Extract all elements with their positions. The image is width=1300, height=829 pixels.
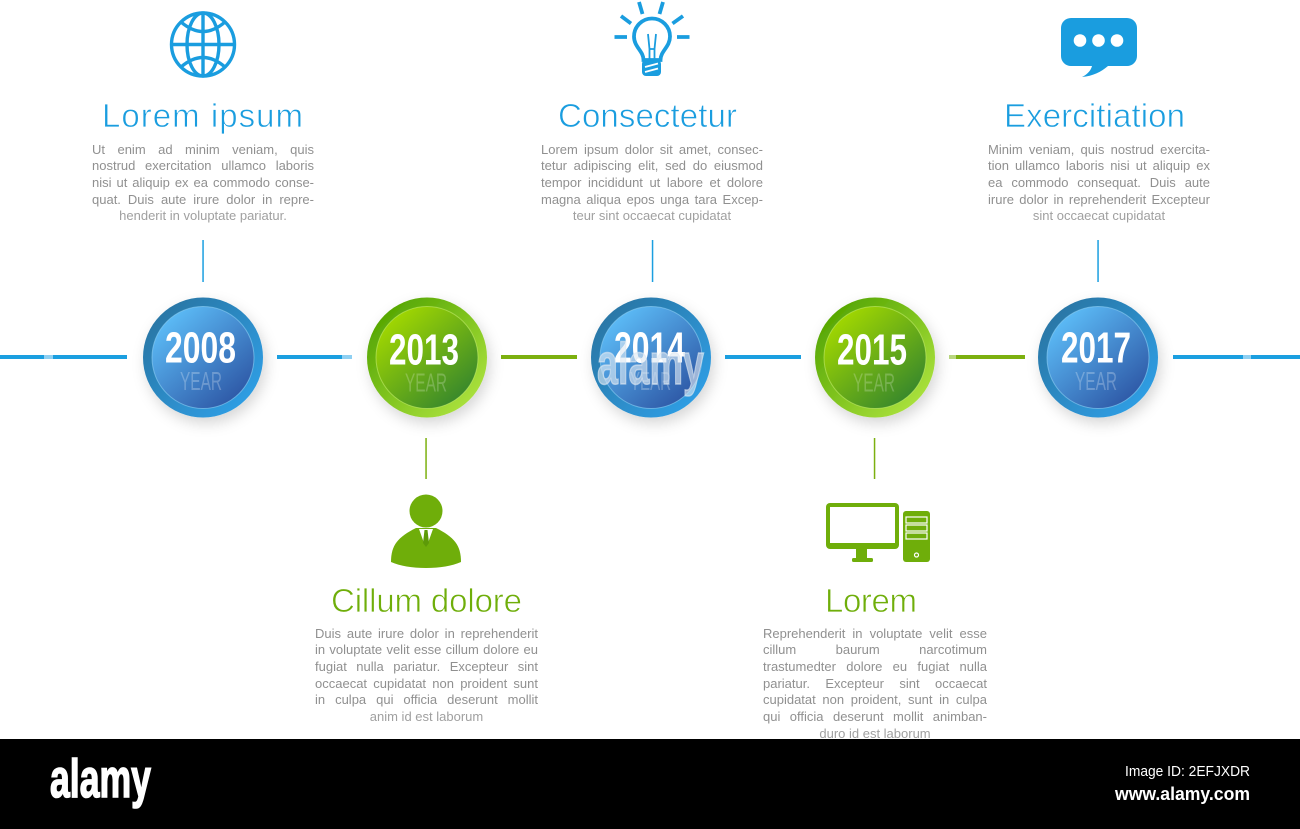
icon: businessman xyxy=(391,494,461,568)
badge: 2015: YEAR xyxy=(853,368,895,398)
badge: 2008 xyxy=(143,298,263,418)
text block xyxy=(763,626,987,739)
panel: Lorem 2015 xyxy=(763,503,987,739)
panel: Lorem ipsum 2008 xyxy=(92,11,314,223)
text block xyxy=(92,142,314,223)
text block: tempor incididunt ut labore et dolore xyxy=(541,175,763,190)
heading: Lorem xyxy=(825,582,917,619)
badge: 2017 xyxy=(1038,298,1158,418)
text block: qui officia deserunt mollit animban- xyxy=(763,709,987,724)
badge: 2017: YEAR xyxy=(1075,366,1117,396)
heading: Lorem ipsum xyxy=(102,97,303,134)
heading: Consectetur xyxy=(558,97,737,134)
badge: 2015 xyxy=(815,298,935,418)
text block: nostrud exercitation ullamco laboris xyxy=(92,158,314,173)
text block: occaecat cupidatat non proident sunt xyxy=(315,676,538,691)
icon: light bulb xyxy=(614,2,690,76)
heading: Cillum dolore xyxy=(331,582,522,619)
text block: cillum baurum narcotimum xyxy=(763,642,987,657)
image id text xyxy=(1114,763,1250,804)
icon: globe xyxy=(170,11,236,78)
text block: trastumedter dolore eu fugiat nulla xyxy=(763,659,987,674)
text block: cupidatat non proident, sunt in culpa xyxy=(763,692,987,707)
text block: Ut enim ad minim veniam, quis xyxy=(92,142,314,156)
text block: Minim veniam, quis nostrud exercita- xyxy=(988,142,1210,156)
badge: 2014: YEAR xyxy=(630,366,671,396)
badge: 2013: 2013 xyxy=(389,326,459,374)
badge: 2013: YEAR xyxy=(405,368,447,398)
text block: anim id est laborum xyxy=(370,709,483,724)
badge: 2014: 2014 xyxy=(614,324,685,372)
text block: magna aliqua epos unga tara Excep- xyxy=(541,192,763,207)
text block: fugiat nulla pariatur. Excepteur sint xyxy=(315,659,538,674)
stems xyxy=(202,240,1099,479)
image id text: www.alamy.com xyxy=(1114,784,1250,804)
panel: Exercitiation 2017 xyxy=(988,18,1210,223)
text block: irure dolor in reprehenderit Excepteur xyxy=(988,192,1210,207)
text block: Reprehenderit in voluptate velit esse xyxy=(763,626,987,640)
badge: 2008: 2008 xyxy=(165,324,236,372)
text block: Duis aute irure dolor in reprehenderit xyxy=(315,626,538,640)
text block: in voluptate velit esse cillum dolore eu xyxy=(315,642,538,657)
timeline xyxy=(0,240,1300,479)
text block: ea commodo consequat. Duis aute xyxy=(988,175,1210,190)
watermark on 2014 badge: alamy xyxy=(597,332,704,397)
text block: tion ullamco laboris nisi ut aliquip ex xyxy=(988,158,1210,173)
text block: sint occaecat cupidatat xyxy=(1033,208,1165,223)
footer: alamy bar xyxy=(0,739,1300,829)
panel: Cillum dolore 2013 xyxy=(315,494,538,724)
text block: Lorem ipsum dolor sit amet, consec- xyxy=(541,142,763,156)
badge: 2015: 2015 xyxy=(837,326,907,374)
text block: quat. Duis aute irure dolor in repre- xyxy=(92,192,314,207)
icon: speech bubble xyxy=(1061,18,1137,77)
text block xyxy=(988,142,1210,223)
text block xyxy=(315,626,538,724)
text block xyxy=(541,142,763,223)
heading: Exercitiation xyxy=(1004,97,1185,134)
badge: 2013 xyxy=(367,298,487,418)
badge: 2008: YEAR xyxy=(180,366,222,396)
icon: desktop computer xyxy=(826,503,930,562)
text block: nisi ut aliquip ex ea commodo conse- xyxy=(92,175,314,190)
text block: in culpa qui officia deserunt mollit xyxy=(315,692,538,707)
text block: henderit in voluptate pariatur. xyxy=(119,208,287,223)
panel: Consectetur 2014 xyxy=(541,2,763,223)
badge: 2014 xyxy=(591,298,711,418)
badge: 2017: 2017 xyxy=(1061,324,1131,372)
text block: tetur adipiscing elit, sed do eiusmod xyxy=(541,158,763,173)
text block: teur sint occaecat cupidatat xyxy=(573,208,731,223)
text block: pariatur. Excepteur sint occaecat xyxy=(763,676,987,691)
connector lines xyxy=(0,355,1300,359)
